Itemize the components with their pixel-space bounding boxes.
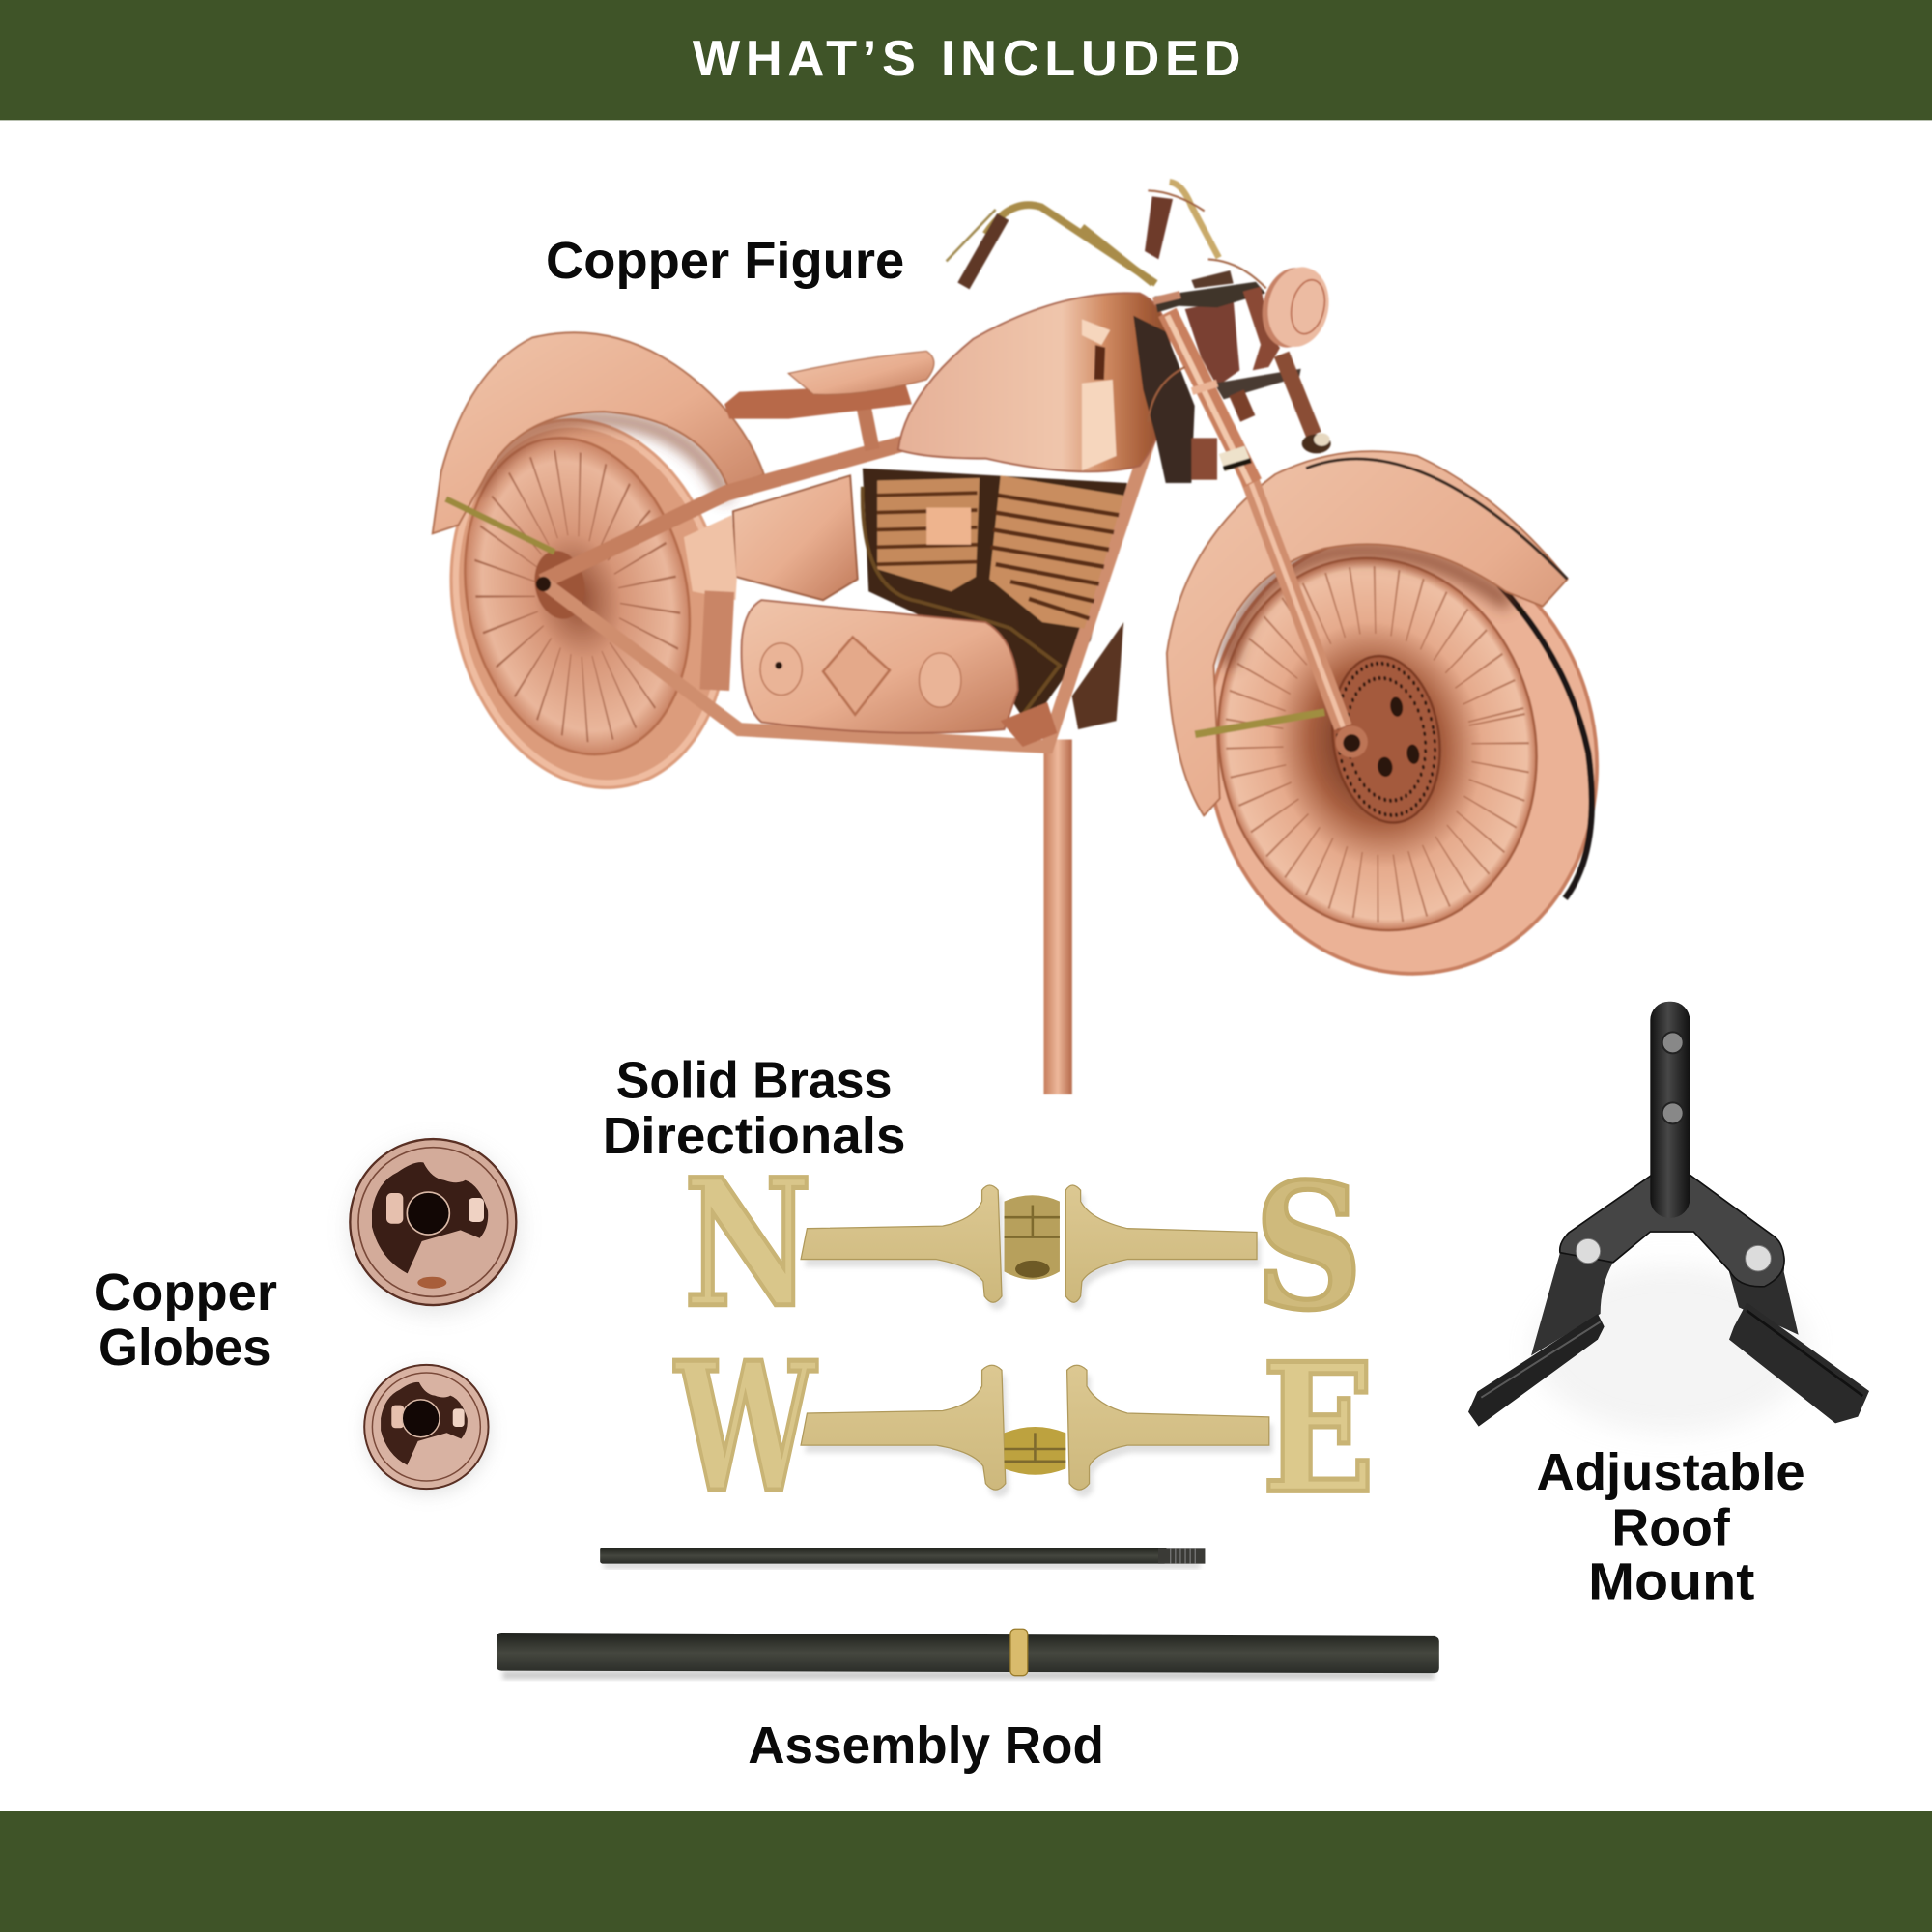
cables <box>1148 190 1266 422</box>
left bar end <box>1082 227 1152 283</box>
right foot <box>1729 1302 1869 1423</box>
screws <box>1662 1032 1684 1053</box>
lower block <box>1191 438 1217 480</box>
letter N: N <box>684 1141 812 1347</box>
letter S: S <box>1254 1146 1363 1349</box>
front cylinder <box>989 475 1123 629</box>
lower frame tube <box>542 394 1164 747</box>
icon: small copper globe <box>364 1365 489 1492</box>
title: WHAT’S INCLUDED <box>693 31 1240 87</box>
tank reflection <box>1082 380 1117 470</box>
stem block <box>1185 299 1239 386</box>
arm right <box>1065 1185 1257 1302</box>
front axle rod <box>1195 712 1324 734</box>
front wheel fender shadow <box>1226 551 1509 666</box>
label: copper globes: Globes <box>99 1320 271 1377</box>
fork clamps <box>1153 295 1180 301</box>
oil tank <box>742 600 1018 733</box>
label: adjustable roof mount <box>1537 1444 1805 1611</box>
icon: adjustable roof mount <box>1468 1002 1869 1433</box>
right bracket <box>1243 287 1280 370</box>
right bar <box>1170 182 1219 258</box>
header band <box>0 0 1932 120</box>
fork lower leg <box>1244 466 1343 727</box>
rear fender <box>433 332 764 533</box>
tank caps <box>760 643 802 695</box>
label: assembly rod: Assembly Rod <box>748 1718 1104 1775</box>
icon: thin threaded rod <box>600 1548 1205 1569</box>
seat frame <box>724 384 912 419</box>
icon: west east directional <box>674 1324 1375 1533</box>
engine rear parts <box>1072 622 1123 729</box>
battery box <box>733 475 858 600</box>
short stub <box>1236 393 1248 418</box>
rear fender brace <box>446 499 554 552</box>
label: copper globes: Copper <box>94 1264 277 1321</box>
letter E: E <box>1262 1325 1375 1533</box>
seat <box>788 352 934 394</box>
brake disc <box>1322 649 1450 830</box>
label: adjustable roof mount: Roof <box>1611 1499 1730 1556</box>
front fender <box>1167 451 1567 815</box>
neck dark mass <box>1133 316 1195 483</box>
rear cylinder <box>877 478 980 591</box>
side panel <box>684 515 737 600</box>
tank diamond <box>823 637 890 715</box>
fuel tank <box>898 293 1171 471</box>
front wheel <box>1167 498 1637 1010</box>
lower cross bar <box>1214 369 1301 399</box>
icon: north south directional <box>684 1141 1363 1349</box>
icon: large copper globe <box>350 1139 517 1311</box>
label: solid brass directionals: Solid Brass <box>616 1052 892 1109</box>
left handlebar brass <box>985 205 1155 283</box>
label: adjustable roof mount: Mount <box>1588 1554 1755 1611</box>
hub <box>1005 1427 1065 1475</box>
arm right <box>1067 1365 1269 1490</box>
yoke <box>1560 1176 1784 1287</box>
tube end <box>536 577 551 591</box>
icon: copper motorcycle figure <box>416 182 1637 1094</box>
left foot <box>1468 1314 1605 1427</box>
fork cream collar <box>1219 446 1251 471</box>
left fork tube <box>1167 312 1253 483</box>
floor shadow <box>1533 1265 1809 1433</box>
right fork tube <box>1282 355 1314 435</box>
rear wheel <box>416 392 761 815</box>
left arm <box>1531 1210 1616 1355</box>
fork end <box>1336 725 1368 757</box>
right grip <box>1145 196 1173 259</box>
bolt left <box>1576 1238 1601 1264</box>
mounting post <box>1043 739 1072 1094</box>
label: adjustable roof mount: Adjustable <box>1537 1444 1805 1501</box>
lower down tube <box>715 591 720 690</box>
label: copper figure: Copper Figure <box>546 233 904 290</box>
seat post <box>863 401 872 450</box>
label: solid brass directionals: Directionals <box>603 1108 906 1165</box>
arm left <box>801 1185 1002 1302</box>
hub <box>1005 1195 1060 1280</box>
headlight <box>1255 263 1327 353</box>
letter W: W <box>674 1324 817 1532</box>
icon: assembly rod <box>497 1629 1439 1680</box>
fender top rim <box>1306 459 1567 579</box>
right arm <box>1729 1243 1799 1335</box>
upper cross bar <box>1154 282 1265 312</box>
brass collar <box>1010 1629 1028 1676</box>
bolt right <box>1746 1245 1771 1271</box>
engine wires <box>863 487 1060 715</box>
right fork collar <box>1302 434 1331 453</box>
engine dark background <box>863 469 1127 727</box>
label: solid brass directionals <box>603 1052 906 1165</box>
rear wheel fender shadow <box>474 418 727 499</box>
label: copper globes <box>94 1264 277 1377</box>
footer band <box>0 1811 1932 1932</box>
headstock assembly <box>1082 182 1336 483</box>
rear frame tube <box>542 441 912 582</box>
frame junction <box>1001 702 1057 747</box>
post <box>1650 1002 1690 1218</box>
left grip <box>963 216 1003 286</box>
arm left <box>801 1365 1006 1490</box>
